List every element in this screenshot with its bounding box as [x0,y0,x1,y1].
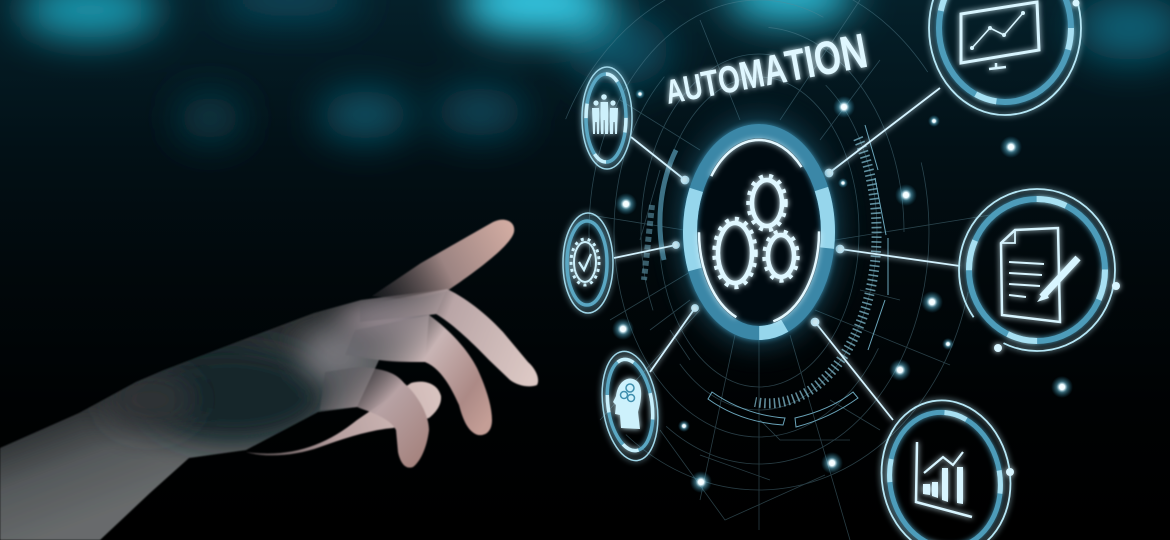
tick ring [644,125,888,427]
curled ring finger [320,367,429,468]
glowing particles [612,89,1073,493]
central gear hub [681,120,837,344]
hand [0,220,538,540]
icon: growth chart [869,390,1023,540]
arm and back of hand [0,289,447,540]
icon: people [582,67,632,169]
pointing second finger [360,289,538,386]
icon: head with gears [596,348,664,464]
icon: quality check [563,213,613,313]
hand shading [105,302,440,445]
blurred teal lights [20,0,1170,140]
connector lines [614,88,960,420]
middle finger [345,315,492,435]
index finger [372,220,514,300]
icon: document and pen [959,189,1120,352]
icon: monitor [929,0,1081,115]
HUD wireframe [544,0,990,540]
gears [714,176,798,287]
title: AUTOMATION [660,24,872,115]
thumb and palm [246,382,441,455]
